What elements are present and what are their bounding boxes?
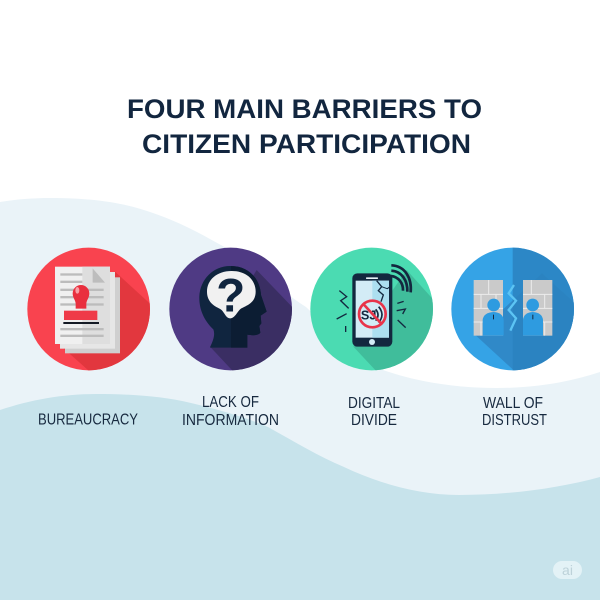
badge: ai watermark (553, 561, 582, 579)
label: digital divide: DIGITAL (348, 395, 400, 412)
panel: lack of information (169, 248, 297, 429)
icon: two people behind split wall (451, 247, 579, 373)
icon: prohibited signal sign: SJ (361, 308, 376, 322)
label: digital divide: DIVIDE (351, 412, 397, 429)
icon: wifi arcs (391, 265, 411, 292)
label: lack of information (182, 394, 279, 429)
icon: red stamp (63, 285, 99, 324)
label: wall of distrust: WALL OF (483, 395, 543, 412)
panel: digital divide (310, 248, 437, 429)
background wave: pale (0, 198, 600, 600)
label: lack of information: LACK OF (202, 394, 259, 411)
icon: right person (523, 299, 543, 336)
icon: shock marks (337, 291, 406, 332)
icon: left person (483, 299, 504, 336)
icon: document stack with red stamp (27, 248, 153, 373)
label: bureaucracy: BUREAUCRACY (38, 412, 138, 428)
title: CITIZEN PARTICIPATION (142, 129, 471, 159)
icon: zigzag crack (509, 285, 516, 331)
badge: ai watermark: ai (562, 562, 573, 578)
panel: bureaucracy (27, 248, 153, 428)
title (127, 94, 482, 159)
label: wall of distrust: DISTRUST (482, 412, 547, 429)
panel: wall of distrust (451, 247, 579, 429)
title: FOUR MAIN BARRIERS TO (127, 94, 482, 124)
icon: cracked phone with no signal (310, 248, 437, 373)
background wave: light blue (0, 394, 600, 600)
icon: head with question mark (169, 248, 297, 373)
label: wall of distrust (482, 395, 547, 429)
label: digital divide (348, 395, 400, 429)
icon: question mark: ? (216, 270, 245, 323)
label: lack of information: INFORMATION (182, 412, 279, 429)
